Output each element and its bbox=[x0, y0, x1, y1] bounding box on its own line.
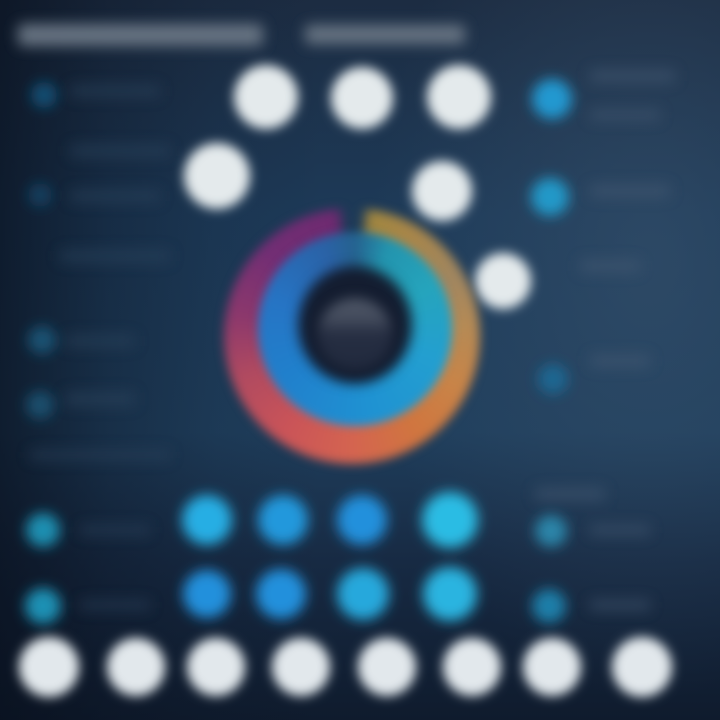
right column text placeholders bbox=[535, 70, 675, 610]
left column text placeholders bbox=[30, 85, 170, 610]
blue circle grid bbox=[182, 492, 478, 621]
blue icons left bbox=[25, 82, 61, 624]
inner ring bbox=[258, 232, 452, 426]
donut centre bbox=[298, 266, 412, 384]
donut centre label bbox=[318, 298, 392, 370]
blue icons right bbox=[531, 79, 572, 623]
white circles top row bbox=[184, 65, 531, 309]
title bbox=[18, 24, 465, 46]
white circles bottom row bbox=[19, 637, 672, 697]
outer ring bbox=[224, 208, 480, 464]
